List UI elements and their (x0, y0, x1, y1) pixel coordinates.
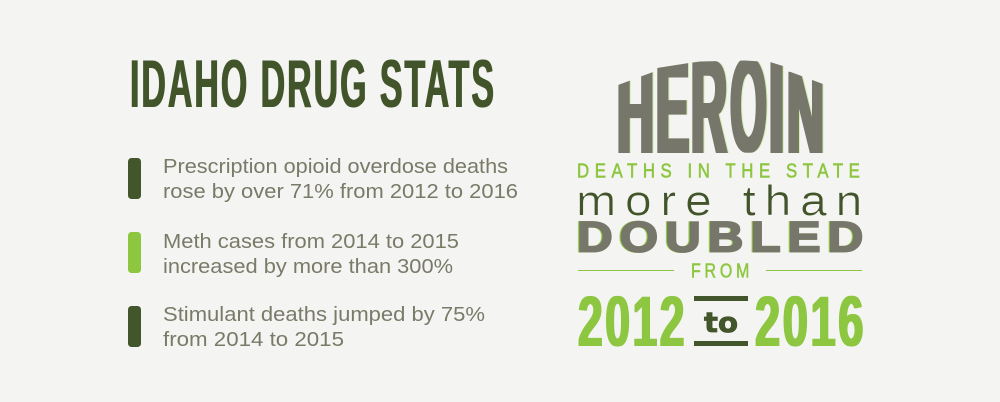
stat 2 (128, 230, 459, 278)
from: FROM (691, 260, 749, 282)
stat 2 text (163, 230, 459, 278)
heroin arched heading: I (769, 34, 785, 181)
stat 1 text: Prescription opioid overdose deaths (163, 155, 508, 178)
subheading: deaths in the state: DEATHS IN THE STATE (577, 159, 860, 182)
heroin arched heading: R (691, 33, 727, 182)
heroin arched heading: E (656, 34, 689, 181)
year 2012: 2012 (578, 283, 687, 362)
stat 3 (128, 303, 485, 351)
year 2016: 2016 (755, 283, 866, 362)
to: to (704, 306, 738, 339)
stat 3 text (163, 303, 485, 351)
stat 1 text: rose by over 71% from 2012 to 2016 (163, 180, 518, 203)
bullet 1 (128, 158, 141, 199)
stat 2 text: increased by more than 300% (163, 255, 453, 278)
stat 1 text (163, 155, 518, 203)
stat 3 text: Stimulant deaths jumped by 75% (163, 303, 485, 326)
to badge (694, 296, 748, 346)
text: N (787, 47, 824, 179)
stat 2 text: Meth cases from 2014 to 2015 (163, 230, 459, 253)
stat 1 (128, 155, 518, 203)
doubled: DOUBLED (577, 213, 863, 261)
more than: more than (576, 177, 862, 224)
heroin arched heading: O (730, 32, 766, 180)
bullet 2 (128, 232, 141, 273)
heroin arched heading (618, 60, 824, 153)
text: IDAHO DRUG STATS (130, 46, 496, 122)
bullet 3 (128, 306, 141, 347)
heroin arched heading: H (617, 47, 654, 179)
stat 3 text: from 2014 to 2015 (163, 328, 344, 351)
